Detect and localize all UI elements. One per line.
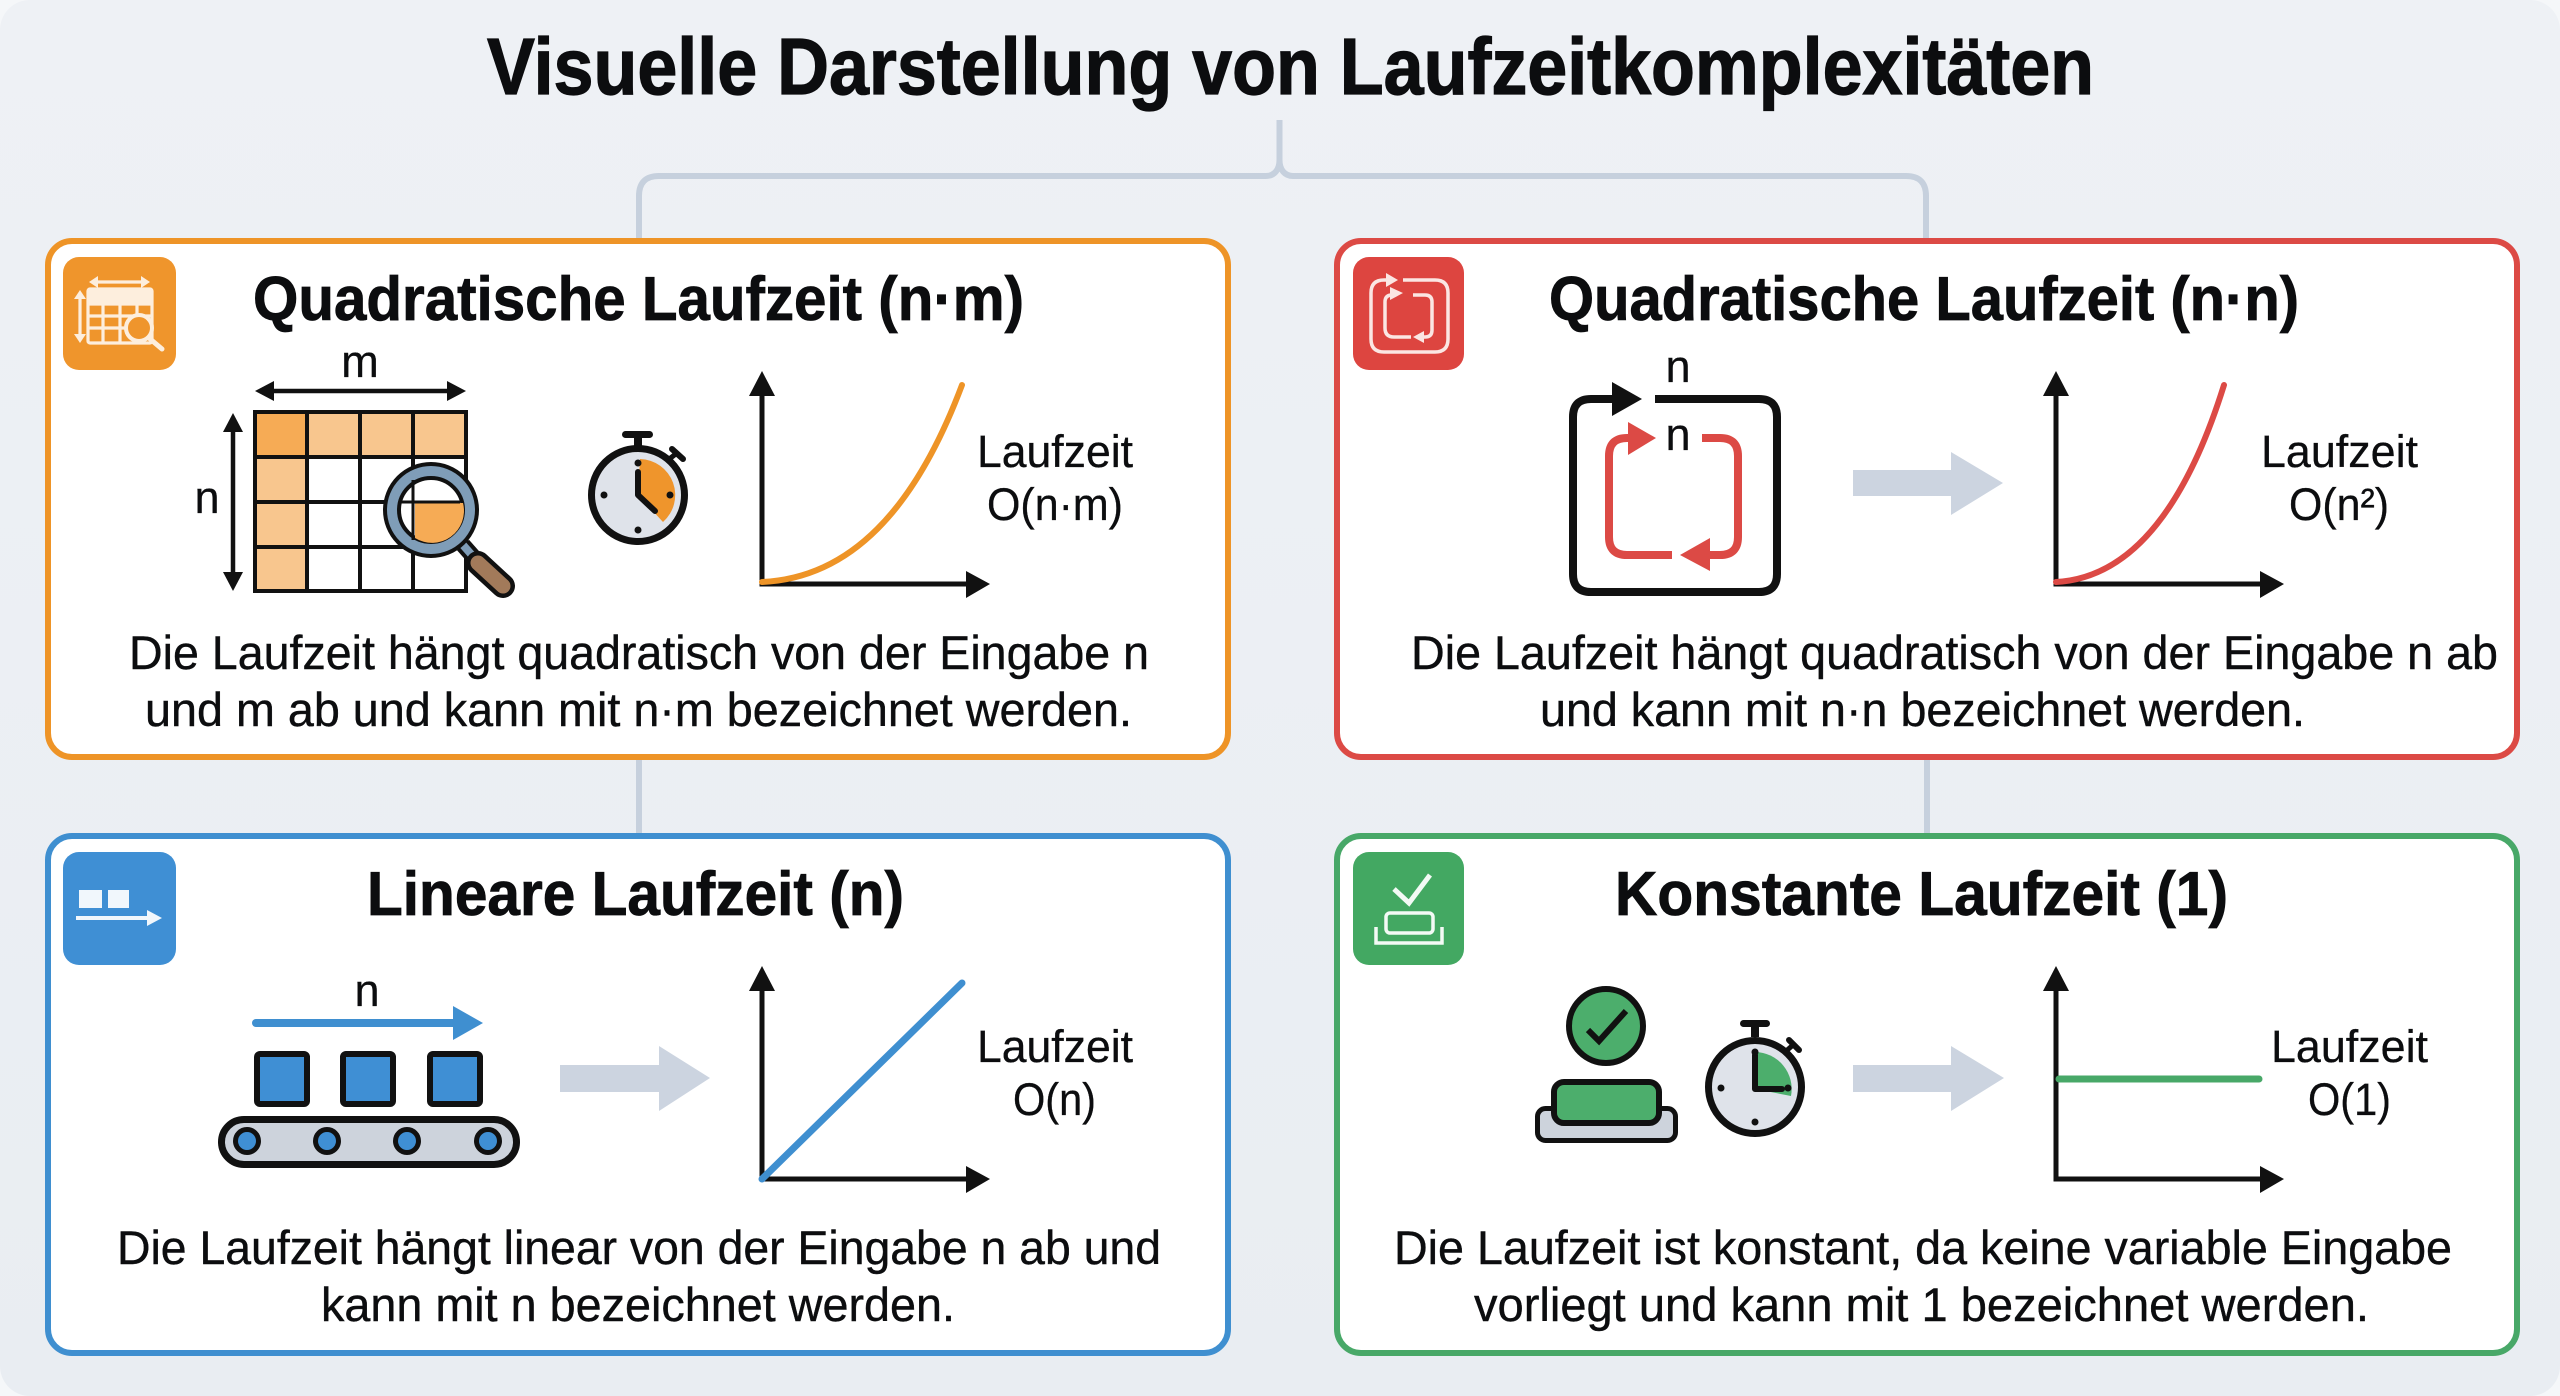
label m: m: [341, 336, 379, 387]
chart label: Laufzeit: [2271, 1021, 2428, 1072]
chart label: Laufzeit: [2261, 426, 2418, 477]
chart label: O(1): [2308, 1074, 2391, 1125]
label n: n: [354, 965, 380, 1016]
chart: quadratic curve: [749, 371, 990, 598]
chart: quadratic curve: [2043, 371, 2284, 598]
chart label: O(n²): [2289, 479, 2389, 530]
icon: items on a line: [63, 852, 176, 965]
description: Die Laufzeit ist konstant, da keine variable Eingabe: [1394, 1221, 2452, 1274]
chart label: [977, 426, 1133, 530]
description: kann mit n bezeichnet werden.: [321, 1278, 955, 1331]
direction arrow: [256, 1006, 483, 1040]
arrow: [560, 1046, 710, 1111]
description: [1394, 1221, 2452, 1331]
description: [117, 1221, 1161, 1331]
description: Die Laufzeit hängt quadratisch von der Eingabe n: [129, 626, 1149, 679]
magnifier: [392, 471, 503, 586]
grid with magnifier: [253, 410, 503, 593]
connector: orange panel to blue panel: [636, 760, 642, 834]
label n: n: [194, 472, 220, 523]
connector: title to top panels: [639, 120, 1926, 238]
panel: constant: [1337, 836, 2517, 1353]
chart label: Laufzeit: [977, 426, 1133, 477]
description: Die Laufzeit hängt quadratisch von der Eingabe n ab: [1411, 626, 2498, 679]
connector: red panel to green panel: [1924, 760, 1930, 834]
conveyor belt: [222, 1120, 516, 1164]
conveyor items: [257, 1054, 480, 1104]
heading: Lineare Laufzeit (n): [367, 860, 904, 929]
chart: constant: [2043, 966, 2284, 1193]
label n inner: n: [1665, 409, 1691, 460]
arrow: [1853, 452, 2003, 515]
dimension arrow n: [223, 413, 243, 591]
heading: Quadratische Laufzeit (n·n): [1549, 265, 2299, 334]
icon: check circle: [1569, 989, 1643, 1063]
panel: linear: [48, 836, 1228, 1353]
icon: stopwatch: [1708, 1020, 1802, 1134]
title: Visuelle Darstellung von Laufzeitkomplexitäten: [487, 22, 2094, 111]
description: [1411, 626, 2498, 736]
chart: linear: [749, 966, 990, 1193]
icon: table with magnifier: [63, 257, 176, 370]
diagram: inner loop: [1609, 422, 1738, 571]
dimension arrow m: [255, 381, 466, 401]
description: und m ab und kann mit n·m bezeichnet werden.: [145, 683, 1132, 736]
chart label: [2271, 1021, 2428, 1125]
panel: quadratic n·m: [48, 241, 1228, 757]
chart label: [977, 1021, 1133, 1125]
chart label: O(n): [1013, 1074, 1096, 1125]
heading: Konstante Laufzeit (1): [1615, 860, 2228, 929]
icon: nested loops: [1353, 257, 1464, 370]
chart label: [2261, 426, 2418, 530]
icon: stopwatch: [592, 431, 684, 542]
chart label: Laufzeit: [977, 1021, 1133, 1072]
description: und kann mit n·n bezeichnet werden.: [1540, 683, 2305, 736]
heading: Quadratische Laufzeit (n·m): [253, 265, 1024, 334]
arrow: [1853, 1046, 2004, 1111]
panel: quadratic n·n: [1337, 241, 2517, 757]
description: [129, 626, 1149, 736]
icon: button on base: [1538, 1082, 1676, 1140]
icon: check on button: [1353, 852, 1464, 965]
description: vorliegt und kann mit 1 bezeichnet werden.: [1474, 1278, 2369, 1331]
description: Die Laufzeit hängt linear von der Eingabe n ab und: [117, 1221, 1161, 1274]
diagram: outer loop: [1573, 382, 1777, 592]
label n outer: n: [1665, 341, 1691, 392]
chart label: O(n·m): [987, 479, 1123, 530]
